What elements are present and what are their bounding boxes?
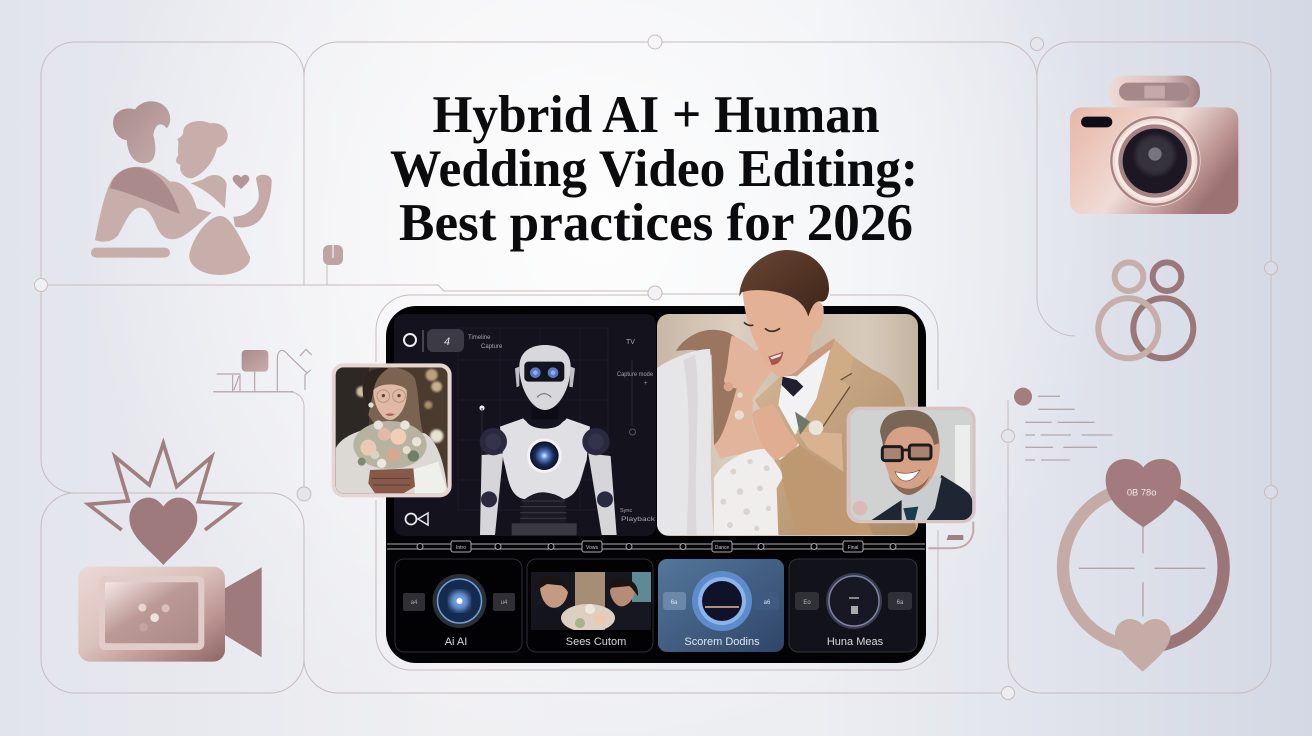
card: scene custom [527, 559, 653, 652]
icon: linked rings [1098, 262, 1193, 358]
title: Wedding Video Editing: [390, 140, 918, 198]
interface small marks [406, 360, 636, 525]
card: AI: u4 [501, 600, 508, 606]
card: human notes [789, 559, 917, 652]
tablet editing interface [386, 306, 926, 663]
card: AI: a4 [411, 600, 418, 606]
title [390, 86, 918, 252]
interface top-left controls [404, 329, 503, 352]
interface top-left controls: Timeline [468, 335, 491, 341]
small clip icon [323, 245, 343, 265]
timeline [387, 541, 925, 552]
title: Best practices for 2026 [399, 194, 913, 252]
ring heart text: 0B 78o [1127, 487, 1156, 497]
groom head [739, 250, 835, 377]
icon: heart ring [1063, 459, 1224, 672]
interface side labels: Sync [620, 508, 632, 514]
icon: photo camera [1070, 76, 1238, 214]
timeline: Final [848, 545, 858, 551]
icon: embracing couple [91, 101, 272, 275]
inset photo: bride with bouquet [332, 363, 452, 497]
card: scorem dodins [658, 559, 784, 652]
timeline: Vows [586, 545, 598, 551]
interface side labels: + [644, 381, 648, 387]
card: scene custom: Sees Cutom [566, 636, 626, 648]
interface top-left controls: Capture [481, 344, 503, 350]
icon: heart, crown and video camera [78, 443, 262, 662]
robot waist [520, 492, 565, 523]
robot joints [480, 428, 507, 455]
card: human notes: Eo [803, 600, 811, 606]
detail text lines with dot [1014, 388, 1112, 460]
robot [480, 345, 617, 535]
card: scorem dodins: 6a [671, 600, 678, 606]
photo: kissing bride and groom [657, 250, 918, 536]
interface grid [458, 328, 608, 510]
title: Hybrid AI + Human [432, 86, 880, 144]
card: scorem dodins: Scorem Dodins [684, 636, 760, 648]
card: scorem dodins: a6 [764, 600, 771, 606]
robot arms [480, 453, 503, 535]
interface side labels: TV [626, 339, 635, 346]
interface side labels: Playback [621, 517, 656, 523]
robot torso [500, 418, 590, 500]
interface side labels [617, 339, 656, 523]
card: AI: Ai AI [445, 636, 467, 648]
card: human notes: 6a [897, 600, 904, 606]
card: AI [395, 559, 522, 652]
timeline: Intro [456, 545, 466, 551]
timeline: Dance [715, 545, 729, 551]
inset photo: smiling editor [847, 407, 976, 548]
small line icon [213, 349, 312, 392]
card: human notes: Huna Meas [827, 636, 884, 648]
interface top-left controls: 4 [444, 336, 450, 348]
interface side labels: Capture mode [617, 372, 654, 378]
